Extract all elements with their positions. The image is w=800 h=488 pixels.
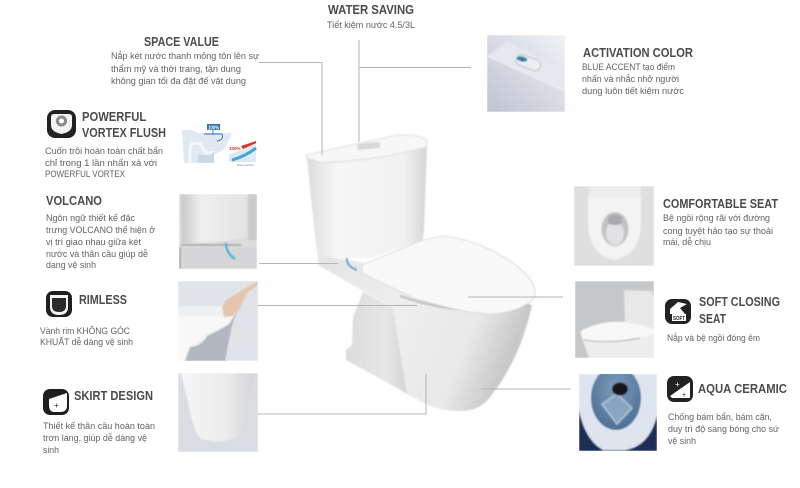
toilet pedestal [346,292,413,397]
text: space value body: không gian tối đa đặt đế vật dụng [111,76,246,86]
text: aqua ceramic body: vệ sinh [668,436,696,446]
image: rimless detail [178,281,258,361]
icon: skirt design [43,389,69,415]
icon: aqua ceramic [667,376,693,402]
heading: soft closing seat: SOFT CLOSING [699,295,780,309]
image: aqua ceramic bowl [579,366,657,451]
icon: aqua ceramic: + [682,392,686,399]
text: comfortable body: cong tuyệt hảo tạo sự thoải [663,226,773,236]
toilet tank body [307,145,427,258]
panel: water saving [327,3,415,30]
diagram: flush cross-section [182,124,256,167]
heading: activation color: ACTIVATION COLOR [583,46,693,60]
image: seat top view [574,186,654,266]
text: volcano body: vị trí giao nhau giữa két [46,237,141,247]
text: activation body: dung luôn tiết kiệm nước [582,86,684,96]
heading: powerful vortex flush: POWERFUL [82,110,147,124]
panel: volcano [46,194,257,270]
text: rimless body: KHUẤT dễ dàng vệ sinh [40,337,133,347]
icon: soft close: SOFT [673,316,685,322]
text: volcano body: Ngôn ngữ thiết kế đặc [46,213,135,223]
panel: powerful vortex flush [45,110,256,179]
panel: comfortable seat [574,186,778,266]
toilet tank lid [306,135,427,163]
panel: space value [111,35,262,86]
diagram: flush cross-section: Bowl surface [237,163,255,167]
text: activation body: BLUE ACCENT tạo điểm [582,62,675,72]
heading: volcano: VOLCANO [46,194,102,208]
leader lines [256,40,571,414]
text: comfortable body: mái, dễ chịu [663,237,711,247]
text: space value body: thẩm mỹ và thời trang, tận dung [111,64,241,74]
panel: rimless [40,281,258,361]
diagram: flush cross-section: 100% [208,125,219,131]
text: volcano body: dang vệ sinh [46,260,96,270]
heading: aqua ceramic: AQUA CERAMIC [698,382,787,396]
panel: activation color [487,35,693,112]
toilet product image [306,135,535,411]
icon: rimless [46,291,72,317]
seat underside shadow [400,296,530,311]
icon: vortex flush [47,110,76,138]
text: aqua ceramic body: Chống bám bẩn, bám cặn, [668,412,772,422]
heading: comfortable seat: COMFORTABLE SEAT [663,197,778,211]
heading: water saving: WATER SAVING [328,3,414,17]
blue accent [347,258,357,270]
icon: soft close [665,299,691,324]
text: comfortable body: Bệ ngồi rộng rãi với đường [663,213,770,223]
heading: rimless: RIMLESS [79,293,127,307]
text: volcano body: trưng VOLCANO thể hiện ở [46,225,155,235]
text: water saving body: Tiết kiệm nước 4.5/3L [327,20,415,30]
panel: aqua ceramic [579,366,787,451]
text: vortex body: Cuốn trôi hoàn toàn chất bẩn [45,146,163,156]
icon: aqua ceramic: + [675,380,680,389]
panel: soft closing seat [575,281,783,358]
text: aqua ceramic body: duy trì độ sang bóng cho sứ [668,424,779,434]
text: rimless body: Vành rim KHÔNG GÓC [40,326,130,336]
diagram: flush cross-section: 100% [229,146,241,151]
text: activation body: nhấn và nhắc nhở người [582,74,679,84]
text: soft closing body: Nắp và bệ ngồi đóng êm [667,333,760,343]
heading: skirt design: SKIRT DESIGN [74,389,153,403]
flush button [357,142,380,150]
heading: soft closing seat: SEAT [699,312,726,326]
seat lid [362,236,535,314]
panel: skirt design [43,373,258,455]
text: vortex body: chỉ trong 1 lần nhấn xả với [45,158,157,168]
image: skirt detail [178,373,258,452]
toilet bowl [318,255,532,411]
text: skirt body: Thiết kế thân cầu hoàn toàn [43,421,155,431]
text: space value body: Nắp két nước thanh mỏng tôn lên sự [111,51,259,61]
heading: powerful vortex flush: VORTEX FLUSH [82,126,166,140]
image: volcano detail [179,194,257,269]
heading: space value: SPACE VALUE [144,35,219,49]
icon: skirt design: + [54,401,59,410]
text: volcano body: nước và thân cầu giúp dễ [46,249,148,259]
text: vortex body: POWERFUL VORTEX [45,169,125,179]
text: skirt body: trơn láng, giúp dễ dàng vệ [43,433,147,443]
image: activation button [487,35,565,112]
text: skirt body: sinh [43,445,59,455]
image: soft closing toilet [575,281,654,358]
